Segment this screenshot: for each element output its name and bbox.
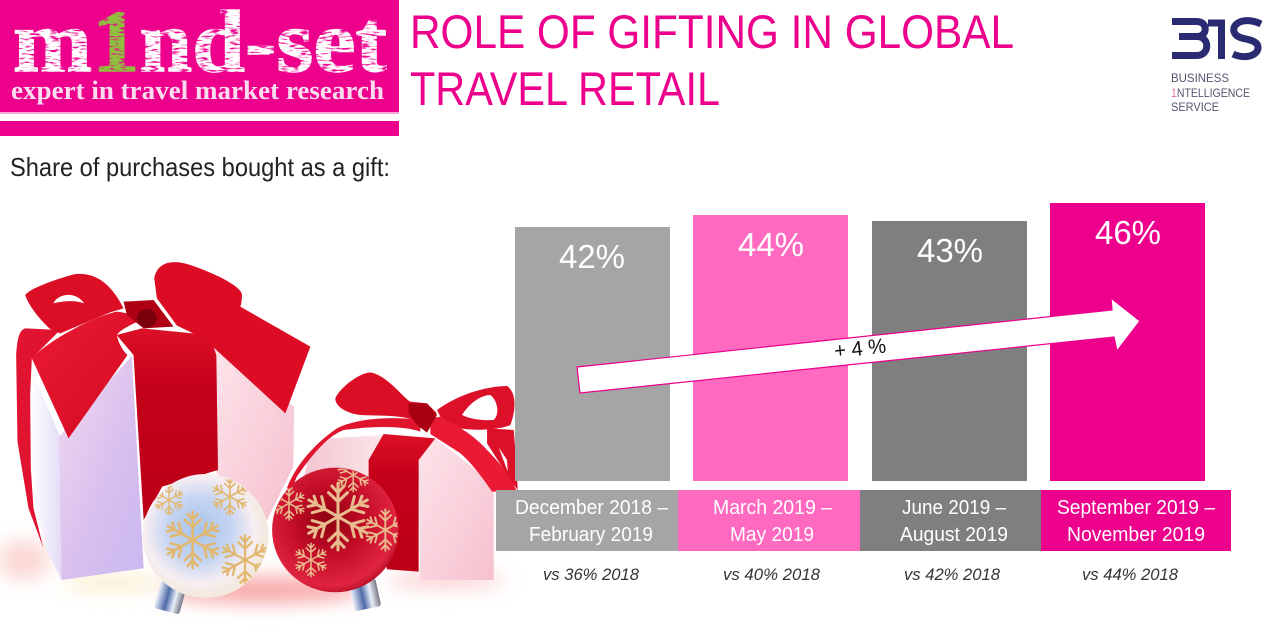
- BIS caption: BUSINESS: [1171, 71, 1229, 85]
- label: Sep - Nov 2019: September 2019 –: [1057, 497, 1216, 519]
- comparison notes vs 2018: vs 44% 2018: [1082, 565, 1179, 584]
- bar: Mar - May 2019: [693, 215, 848, 481]
- header strip: [0, 121, 399, 136]
- label: Jun - Aug 2019: August 2019: [900, 524, 1008, 546]
- period labels: [496, 490, 1231, 551]
- logo: BIS: [1171, 21, 1261, 114]
- small gift box: [287, 372, 518, 580]
- label: Sep - Nov 2019: November 2019: [1067, 524, 1205, 546]
- label: Jun - Aug 2019: June 2019 –: [902, 497, 1007, 519]
- white bauble: [143, 474, 271, 615]
- bar: Mar - May 2019: 44%: [738, 226, 804, 263]
- arrow: +4% trend: + 4 %: [833, 335, 887, 363]
- arrow: +4% trend: [577, 298, 1140, 393]
- label: Mar - May 2019: [678, 490, 860, 551]
- bar: Jun - Aug 2019: 43%: [917, 232, 983, 269]
- label: Jun - Aug 2019: [860, 490, 1041, 551]
- label: Dec 2018 - Feb 2019: [496, 490, 678, 551]
- logo tagline: expert in travel market research: [11, 76, 385, 105]
- red bauble: [272, 468, 398, 611]
- comparison notes vs 2018: vs 42% 2018: [904, 565, 1001, 584]
- logo: mind-set: [0, 0, 399, 114]
- label: Mar - May 2019: March 2019 –: [713, 497, 833, 519]
- BIS caption: SERVICE: [1171, 100, 1219, 114]
- title: [410, 5, 1014, 115]
- subtitle: Share of purchases bought as a gift:: [10, 152, 390, 182]
- BIS caption: 1NTELLIGENCE: [1171, 86, 1250, 100]
- bar: Sep - Nov 2019: 46%: [1095, 214, 1161, 251]
- label: Sep - Nov 2019: [1041, 490, 1231, 551]
- floor shadow: [0, 540, 504, 603]
- label: Mar - May 2019: May 2019: [730, 524, 814, 546]
- bar chart: [515, 203, 1205, 481]
- comparison notes vs 2018: [543, 565, 1179, 584]
- comparison notes vs 2018: vs 36% 2018: [543, 565, 640, 584]
- BIS caption: [1171, 71, 1250, 114]
- bar: Dec 2018 - Feb 2019: [515, 227, 670, 481]
- bar: Jun - Aug 2019: [872, 221, 1027, 481]
- large gift box: [16, 262, 310, 580]
- label: Dec 2018 - Feb 2019: December 2018 –: [515, 497, 669, 519]
- BIS mark: [1172, 21, 1261, 59]
- comparison notes vs 2018: vs 40% 2018: [723, 565, 821, 584]
- bar: Dec 2018 - Feb 2019: 42%: [559, 238, 625, 275]
- title: ROLE OF GIFTING IN GLOBAL: [410, 5, 1014, 58]
- large bow: [16, 262, 310, 548]
- image: gift boxes and baubles: [0, 262, 518, 615]
- bar: Sep - Nov 2019: [1050, 203, 1205, 481]
- title: TRAVEL RETAIL: [410, 62, 720, 115]
- label: Dec 2018 - Feb 2019: February 2019: [529, 524, 653, 546]
